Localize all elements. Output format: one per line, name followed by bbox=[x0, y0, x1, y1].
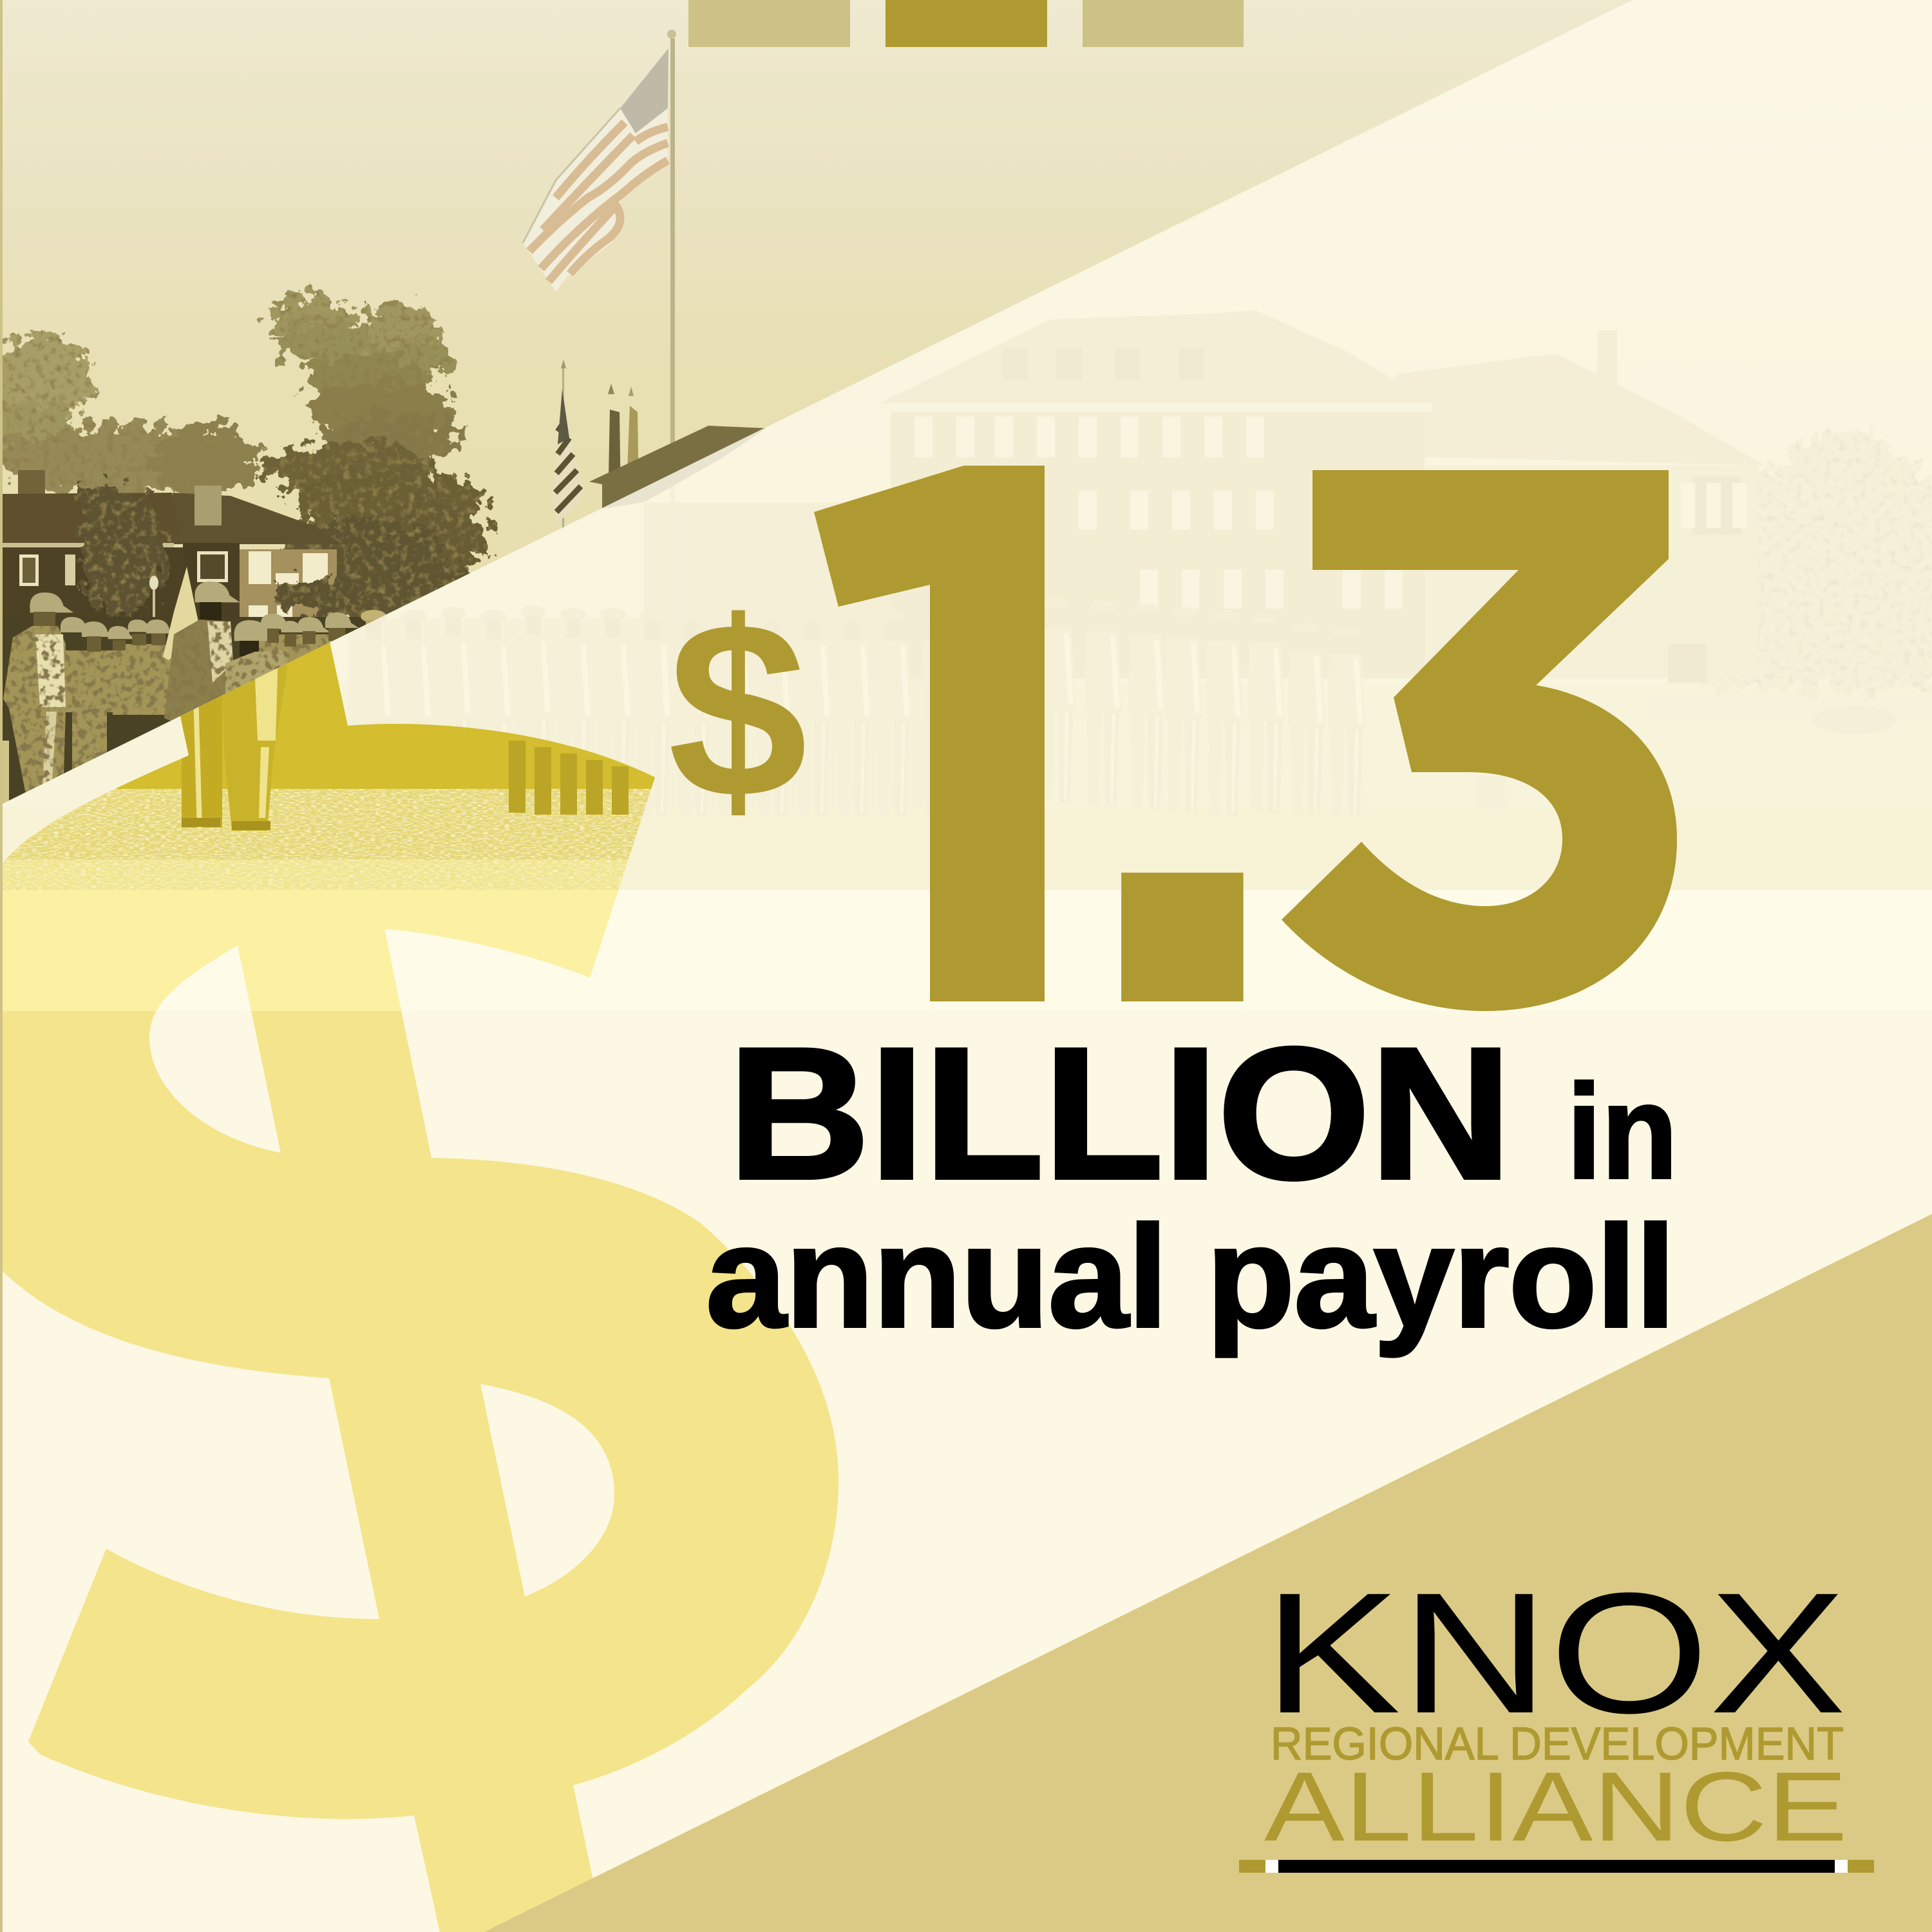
roof behind the flags bbox=[589, 426, 766, 509]
pale diagonal overlay over photo bbox=[0, 0, 1932, 890]
brick officers' house bbox=[0, 470, 341, 631]
gold corner triangle bbox=[484, 1214, 1932, 1932]
headline: annual payroll: annual payroll bbox=[706, 1195, 1676, 1358]
photo seen through the dollar sign bbox=[0, 580, 837, 890]
sharp left scene above the diagonal bbox=[0, 293, 489, 810]
lighter band under photo bbox=[0, 890, 1932, 1011]
decimal point: . bbox=[1063, 218, 1303, 1185]
dark tree by house bbox=[77, 486, 357, 618]
ghost building: main hall bbox=[880, 310, 1741, 679]
front soldier, flag bearer and escort torsos bbox=[164, 620, 287, 728]
small ceremonial flags bbox=[553, 359, 639, 531]
colour guard flag bbox=[163, 567, 200, 660]
logo: Knox Regional Development Alliance bbox=[1239, 1557, 1874, 1873]
logo word KNOX: KNOX bbox=[1264, 1557, 1846, 1749]
american flag bbox=[523, 48, 668, 292]
far left tree canopy bbox=[0, 335, 258, 498]
soldier caps bbox=[30, 582, 359, 641]
small dollar: $ bbox=[668, 569, 808, 850]
flag pole bbox=[667, 30, 676, 444]
lamp post bbox=[149, 576, 158, 621]
tab left bbox=[688, 0, 850, 47]
headline: BILLION in bbox=[728, 1009, 1678, 1218]
pine tree bbox=[261, 293, 489, 638]
rear rank of soldiers bbox=[66, 634, 354, 773]
logo line REGIONAL DEVELOPMENT: REGIONAL DEVELOPMENT bbox=[1271, 1719, 1844, 1770]
front soldiers, yellow bbox=[182, 650, 287, 831]
front soldier, left bbox=[3, 626, 66, 794]
BILLION: BILLION bbox=[728, 1009, 1511, 1218]
ghost building: wing bbox=[1370, 330, 1765, 683]
dark yellow tree line bbox=[0, 580, 837, 789]
ground and hedge bbox=[348, 627, 362, 634]
house windows bbox=[19, 551, 328, 618]
logo word ALLIANCE: ALLIANCE bbox=[1264, 1752, 1848, 1862]
logo rule bbox=[1239, 1860, 1874, 1873]
sky bbox=[3, 0, 1632, 683]
top tab bars bbox=[688, 0, 1244, 47]
hall windows bbox=[914, 417, 1747, 609]
digit 1: 1 bbox=[746, 296, 1206, 1167]
in: in bbox=[1567, 1057, 1678, 1207]
digit 3: 3 bbox=[1269, 324, 1706, 1160]
chimney left bbox=[18, 470, 45, 496]
distant right trees bbox=[1687, 431, 1932, 689]
headline figure: $1.3 bbox=[668, 218, 1706, 1185]
left edge strip bbox=[0, 0, 3, 1932]
tab right bbox=[1083, 0, 1244, 47]
ghost soldiers row bbox=[355, 597, 1897, 816]
boots of rear troop row bbox=[509, 741, 629, 815]
photo: Fort Knox parade field bbox=[0, 0, 1932, 890]
tab centre bbox=[886, 0, 1047, 47]
yellow grass bbox=[0, 789, 837, 860]
soldier faces bbox=[33, 602, 345, 656]
pale field bbox=[0, 1011, 1932, 1932]
dark hedge behind troops bbox=[0, 617, 399, 810]
